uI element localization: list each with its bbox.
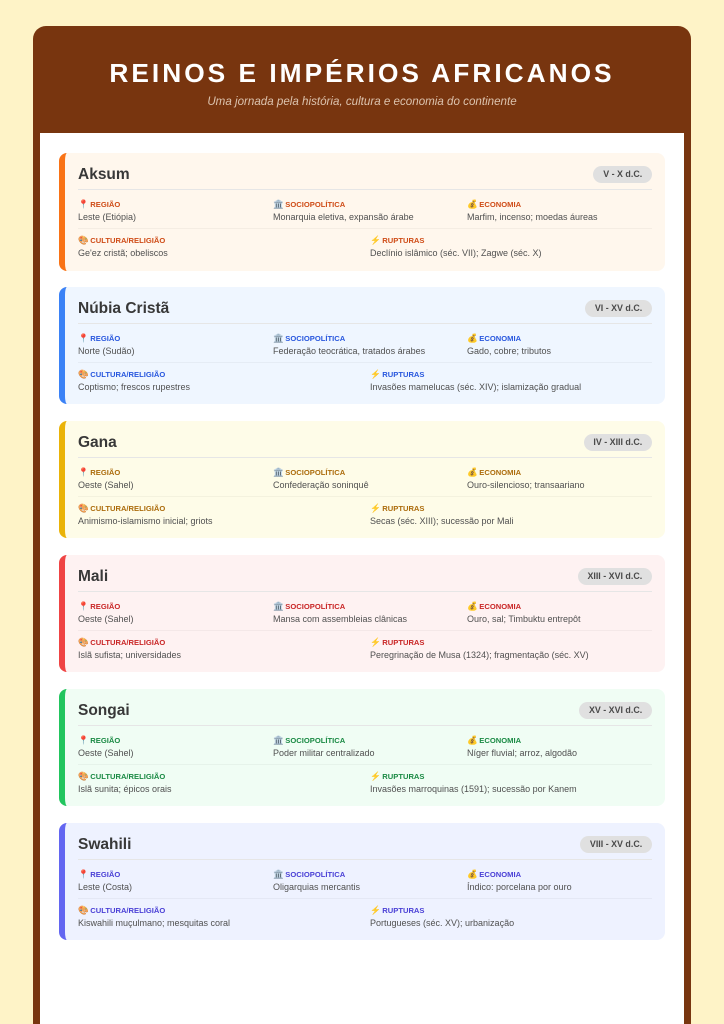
field: rupturas: ⚡ RUPTURAS — [370, 905, 424, 915]
field: cultura/religião: Islã sunita; épicos orais — [78, 784, 172, 794]
kingdom name: Aksum — [78, 166, 130, 183]
field: cultura/religião — [78, 771, 172, 794]
field: rupturas — [370, 637, 589, 660]
field: região: Oeste (Sahel) — [78, 614, 134, 624]
field: rupturas: ⚡ RUPTURAS — [370, 637, 424, 647]
field: cultura/religião: 🎨 CULTURA/RELIGIÃO — [78, 503, 165, 513]
field: economia — [467, 869, 572, 892]
field: região: Leste (Costa) — [78, 882, 132, 892]
field: rupturas: Declínio islâmico (séc. VII); Zagwe (séc. X) — [370, 248, 542, 258]
field: cultura/religião: Kiswahili muçulmano; mesquitas coral — [78, 918, 230, 928]
title: REINOS E IMPÉRIOS AFRICANOS — [109, 58, 615, 88]
field: rupturas: ⚡ RUPTURAS — [370, 235, 424, 245]
period badge — [580, 836, 652, 853]
field: cultura/religião: Animismo-islamismo inicial; griots — [78, 516, 213, 526]
field: região: 📍 REGIÃO — [78, 467, 120, 477]
panel: Songai — [59, 689, 665, 806]
period badge: V - X d.C. — [603, 169, 642, 179]
field: região: 📍 REGIÃO — [78, 869, 120, 879]
field: rupturas — [370, 369, 581, 392]
content background — [40, 133, 684, 1024]
field: economia: 💰 ECONOMIA — [467, 735, 521, 745]
kingdom name: Songai — [78, 702, 130, 719]
field: economia: Gado, cobre; tributos — [467, 346, 551, 356]
field: cultura/religião — [78, 235, 168, 258]
field: rupturas — [370, 235, 542, 258]
field: economia: 💰 ECONOMIA — [467, 601, 521, 611]
field: rupturas — [370, 503, 514, 526]
field: sociopolítica: Monarquia eletiva, expansão árabe — [273, 212, 414, 222]
panel: Aksum — [59, 153, 665, 271]
field: sociopolítica: Oligarquias mercantis — [273, 882, 360, 892]
field: região — [78, 735, 134, 758]
field: sociopolítica — [273, 735, 375, 758]
field: rupturas: ⚡ RUPTURAS — [370, 771, 424, 781]
field: rupturas — [370, 905, 514, 928]
field: cultura/religião — [78, 905, 230, 928]
header — [109, 58, 615, 108]
field: economia — [467, 601, 581, 624]
field: sociopolítica: 🏛️ SOCIOPOLÍTICA — [273, 601, 345, 611]
field: sociopolítica — [273, 199, 414, 222]
period badge — [578, 568, 652, 585]
field: rupturas: ⚡ RUPTURAS — [370, 503, 424, 513]
field: economia: Níger fluvial; arroz, algodão — [467, 748, 577, 758]
field: economia: 💰 ECONOMIA — [467, 869, 521, 879]
field: sociopolítica — [273, 467, 369, 490]
field: sociopolítica: Confederação soninquê — [273, 480, 369, 490]
field: economia: 💰 ECONOMIA — [467, 467, 521, 477]
field: região: 📍 REGIÃO — [78, 333, 120, 343]
field: região: 📍 REGIÃO — [78, 199, 120, 209]
field: sociopolítica: Federação teocrática, tratados árabes — [273, 346, 425, 356]
field: cultura/religião — [78, 637, 181, 660]
field: região — [78, 869, 132, 892]
field: economia: 💰 ECONOMIA — [467, 199, 521, 209]
field: economia: Marfim, incenso; moedas áureas — [467, 212, 598, 222]
period badge — [584, 434, 652, 451]
field: região — [78, 601, 134, 624]
field: economia — [467, 735, 577, 758]
kingdom name: Swahili — [78, 836, 131, 853]
field: sociopolítica: Mansa com assembleias clânicas — [273, 614, 407, 624]
field: região: Leste (Etiópia) — [78, 212, 136, 222]
field: sociopolítica: Poder militar centralizado — [273, 748, 375, 758]
field: sociopolítica: 🏛️ SOCIOPOLÍTICA — [273, 735, 345, 745]
field: economia: Índico: porcelana por ouro — [467, 882, 572, 892]
kingdom name: Mali — [78, 568, 108, 585]
field: economia: Ouro, sal; Timbuktu entrepôt — [467, 614, 581, 624]
field: cultura/religião: Coptismo; frescos rupestres — [78, 382, 190, 392]
field: economia — [467, 199, 598, 222]
field: região: Oeste (Sahel) — [78, 480, 134, 490]
panel: Mali — [59, 555, 665, 672]
field: região: Norte (Sudão) — [78, 346, 135, 356]
field: rupturas: Peregrinação de Musa (1324); fragmentação (séc. XV) — [370, 650, 589, 660]
field: rupturas: Invasões mamelucas (séc. XIV); islamização gradual — [370, 382, 581, 392]
field: sociopolítica: 🏛️ SOCIOPOLÍTICA — [273, 199, 345, 209]
period badge: XV - XVI d.C. — [589, 705, 642, 715]
field: sociopolítica — [273, 333, 425, 356]
field: rupturas — [370, 771, 577, 794]
field: região — [78, 199, 136, 222]
field: cultura/religião — [78, 503, 213, 526]
field: cultura/religião: Islã sufista; universidades — [78, 650, 181, 660]
field: cultura/religião: 🎨 CULTURA/RELIGIÃO — [78, 905, 165, 915]
field: região — [78, 467, 134, 490]
field: economia — [467, 467, 585, 490]
field: rupturas: Invasões marroquinas (1591); sucessão por Kanem — [370, 784, 577, 794]
period badge: XIII - XVI d.C. — [587, 571, 642, 581]
field: cultura/religião: 🎨 CULTURA/RELIGIÃO — [78, 235, 165, 245]
period badge — [579, 702, 652, 719]
field: cultura/religião — [78, 369, 190, 392]
field: cultura/religião: 🎨 CULTURA/RELIGIÃO — [78, 369, 165, 379]
field: economia: Ouro-silencioso; transaariano — [467, 480, 585, 490]
field: cultura/religião: Ge'ez cristã; obeliscos — [78, 248, 168, 258]
field: sociopolítica — [273, 869, 360, 892]
kingdom name: Gana — [78, 434, 117, 451]
field: cultura/religião: 🎨 CULTURA/RELIGIÃO — [78, 771, 165, 781]
kingdom name: Núbia Cristã — [78, 300, 169, 317]
field: sociopolítica: 🏛️ SOCIOPOLÍTICA — [273, 869, 345, 879]
field: região — [78, 333, 135, 356]
period badge: VIII - XV d.C. — [590, 839, 642, 849]
period badge: VI - XV d.C. — [595, 303, 642, 313]
panel: Swahili — [59, 823, 665, 940]
field: rupturas: ⚡ RUPTURAS — [370, 369, 424, 379]
field: rupturas: Portugueses (séc. XV); urbanização — [370, 918, 514, 928]
period badge — [593, 166, 652, 183]
field: sociopolítica: 🏛️ SOCIOPOLÍTICA — [273, 467, 345, 477]
field: região: Oeste (Sahel) — [78, 748, 134, 758]
field: região: 📍 REGIÃO — [78, 735, 120, 745]
field: região: 📍 REGIÃO — [78, 601, 120, 611]
panel: Núbia Cristã — [59, 287, 665, 404]
panel: Gana — [59, 421, 665, 538]
field: sociopolítica — [273, 601, 407, 624]
period badge — [585, 300, 652, 317]
field: cultura/religião: 🎨 CULTURA/RELIGIÃO — [78, 637, 165, 647]
period badge: IV - XIII d.C. — [593, 437, 642, 447]
field: rupturas: Secas (séc. XIII); sucessão por Mali — [370, 516, 514, 526]
field: sociopolítica: 🏛️ SOCIOPOLÍTICA — [273, 333, 345, 343]
subtitle: Uma jornada pela história, cultura e economia do continente — [207, 95, 517, 108]
field: economia: 💰 ECONOMIA — [467, 333, 521, 343]
field: economia — [467, 333, 551, 356]
